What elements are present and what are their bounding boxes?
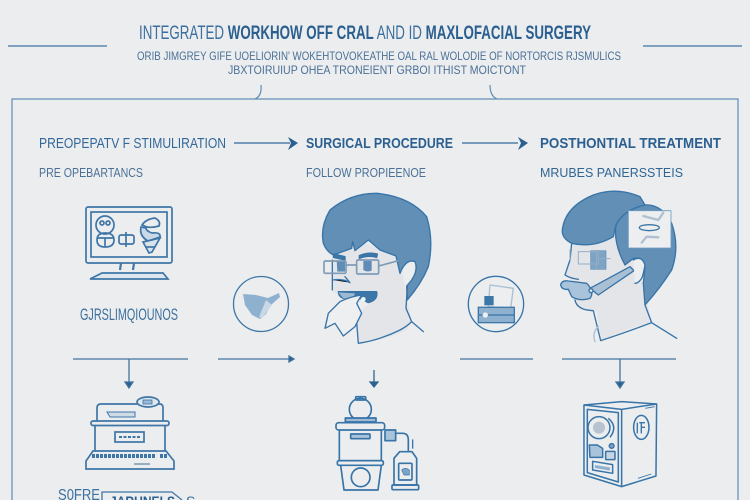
heading: preoperative simulation: PREOPEPATV F STIMULIRATION	[39, 135, 226, 152]
illustration: patient with glasses	[322, 193, 431, 343]
arrow: column two down	[370, 370, 378, 387]
arrow: to bottom column two	[218, 356, 294, 362]
icon: circular equipment	[468, 276, 524, 332]
icon: circular bone model	[234, 276, 288, 332]
arrow: procedure to treatment	[462, 137, 528, 150]
sublabel: column two: FOLLOW PROPIEENOE	[306, 165, 426, 180]
subtitle: ORIB JIMGREY GIFE UOELIORIN' WOKEHTOVOKEATHE OAL RAL WOLODIE OF NORTORCIS RJSMULICS	[137, 49, 621, 63]
caption: simulation label: GJRSLIMQIOUNOS	[80, 305, 178, 324]
caption: bottom label, clipped by page edge	[58, 487, 195, 500]
subtitle	[137, 49, 621, 77]
sublabel: column three: MRUBES PANERSSTEIS	[540, 165, 683, 180]
icon: monitor with scans	[86, 207, 172, 279]
icon: hardware unit	[584, 402, 657, 487]
arrow: simulation to procedure	[234, 137, 298, 150]
title: INTEGRATED WORKHOW OFF CRAL AND ID MAXLOFACIAL SURGERY	[139, 23, 591, 44]
connector: column three split	[562, 359, 676, 388]
sublabel: column one: PRE OPEBARTANCS	[39, 165, 143, 180]
heading: postoperative treatment: POSTHONTIAL TREATMENT	[540, 135, 721, 152]
subtitle: JBXTOIRUIUP OHEA TRONEIENT GRBOI ITHIST MOICTONT	[228, 63, 527, 77]
connector: column two divider	[460, 358, 533, 360]
heading: surgical procedure: SURGICAL PROCEDURE	[306, 135, 453, 152]
connector: column one split	[73, 359, 188, 388]
icon: surgical device	[336, 397, 419, 490]
illustration: patient side profile	[561, 191, 677, 342]
icon: laptop workstation	[86, 397, 174, 469]
